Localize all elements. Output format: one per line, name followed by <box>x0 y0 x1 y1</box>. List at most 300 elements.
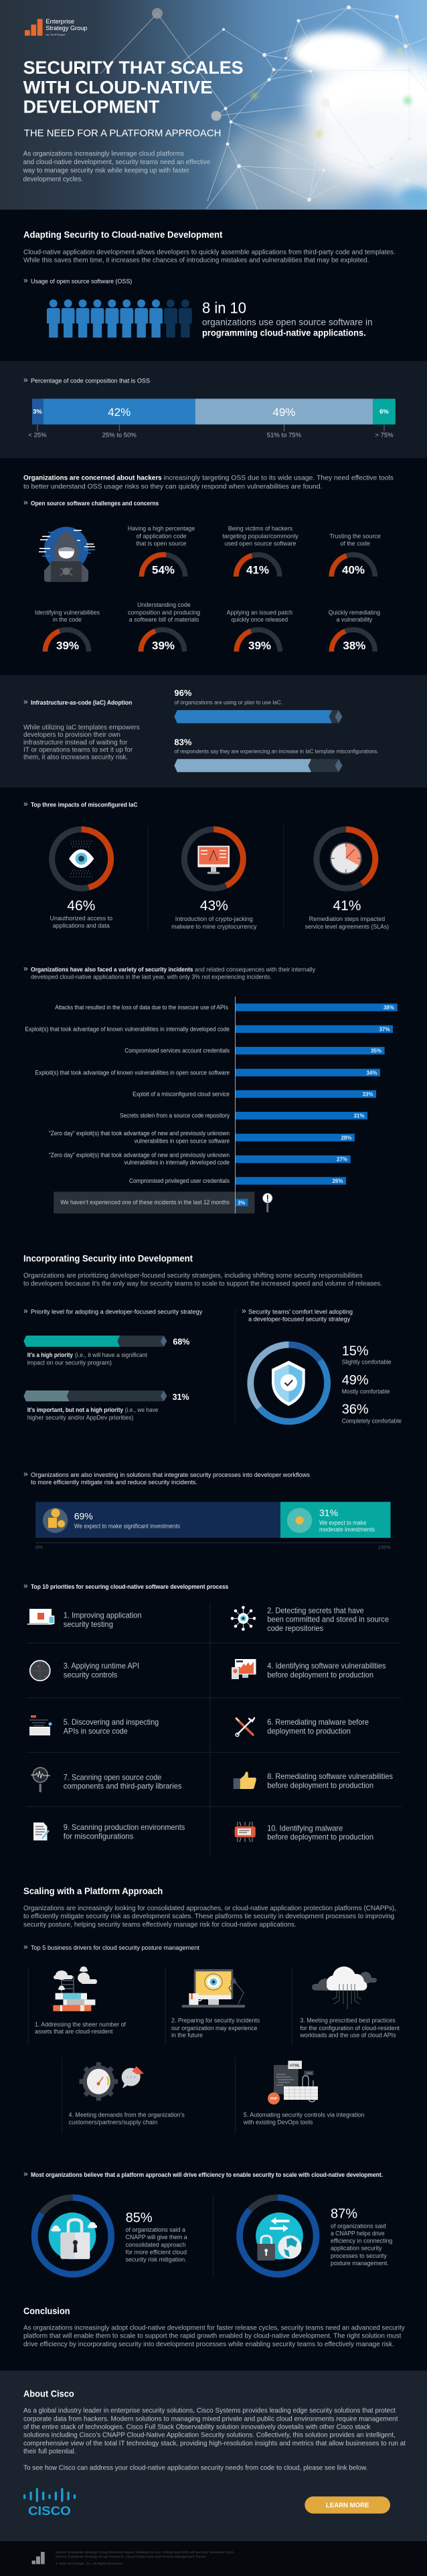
logo: Enterprise Strategy Group: by TechTarget <box>46 33 66 36</box>
label: usage of OSS <box>23 276 132 285</box>
gauge: 39% understanding code: composition and producing <box>128 609 200 616</box>
bar chart: security incidents: Secrets stolen from a source code repository <box>120 1113 230 1120</box>
bar chart: security incidents: Exploit of a misconfigured cloud service <box>133 1090 230 1098</box>
logo: Cisco: CISCO <box>28 2504 71 2518</box>
label: investing in solutions: » <box>23 1470 28 1479</box>
priority 7 <box>31 1768 181 1792</box>
intro text: and cloud-native development, security teams need an effective <box>23 158 211 166</box>
bar chart: security incidents: 28% <box>341 1135 352 1141</box>
impact: 41% remediation <box>305 829 389 930</box>
legend: comfort levels: 36% <box>342 1403 369 1417</box>
title <box>23 58 244 117</box>
bar chart: security incidents: Compromised privileged user credentials <box>129 1177 230 1185</box>
illustration: code, keyboard, PHP: PHP <box>270 2097 278 2101</box>
section intro: consolidated approaches: Organizations are increasingly looking for consolidated approaches, or cloud-native application protection platforms (CNAPPs), <box>23 1904 396 1912</box>
stat bar: 83% <box>174 737 379 772</box>
gauge: 39% understanding code: 39% <box>152 639 175 652</box>
stacked bar chart: 49% <box>272 406 295 419</box>
stacked bar: investment expectations: 69% <box>74 1510 93 1521</box>
illustration: gear gauge and chat <box>79 2062 144 2100</box>
gauge: 54%: 54% <box>152 564 175 577</box>
footer logo bars <box>32 2552 45 2564</box>
priority 4: 4. Identifying software vulnerabilities <box>267 1661 386 1670</box>
section intro: consolidated approaches: to efficiently mitigate security risk as development scales. These platforms tie security in development processes to improving <box>23 1912 394 1920</box>
section intro: prioritizing strategies <box>23 1271 382 1287</box>
stat: 8 in 10 organizations <box>202 299 373 338</box>
text: organizations concerned about hackers: Organizations are concerned about hackers <box>23 474 162 482</box>
stacked bar chart: 51% to 75% <box>267 432 302 439</box>
subtitle: THE NEED FOR A PLATFORM APPROACH <box>24 127 221 139</box>
priority 4 <box>232 1659 386 1679</box>
callout box: no incidents <box>54 1192 254 1214</box>
stacked bar: investment expectations: moderate investments <box>319 1526 375 1532</box>
stat bar: 96%: 96% <box>174 688 192 698</box>
impact: 46% unauthorized access: applications and data <box>53 922 110 930</box>
icon: single coin <box>287 1508 312 1533</box>
gauge grid: challenges <box>35 525 381 652</box>
about Cisco text: corporate data from hackers. Modern solutions to managing mixed private and public cloud environments require management <box>23 2415 398 2423</box>
bar chart: security incidents: 34% <box>366 1070 377 1076</box>
section intro text: Cloud-native application development allows developers to quickly assemble applications from third-party code and templates. <box>23 248 396 256</box>
label: top three impacts <box>23 799 138 809</box>
bar chart: security incidents: Attacks that resulted in the loss of data due to the insecure use of APIs <box>55 1004 228 1011</box>
stacked bar: investment expectations: 100% <box>377 1545 391 1551</box>
panel: about Cisco <box>0 2370 427 2541</box>
gauge: 38% <box>329 609 380 652</box>
about Cisco text: As a global industry leader in enterprise security solutions, Cisco Systems provides leading edge security solutions that protect <box>23 2407 396 2415</box>
icon: coin stack <box>43 1508 68 1533</box>
label: percentage of code composition <box>23 375 150 385</box>
impact: 46% unauthorized access: 46% <box>67 898 95 914</box>
label: platform approach belief <box>23 2169 383 2179</box>
label: percentage of code composition: » <box>23 375 28 384</box>
bar: 68% high priority: impact on our security program) <box>27 1359 112 1366</box>
stat: 8 in 10 organizations: 8 in 10 <box>202 299 246 317</box>
section intro: consolidated approaches <box>23 1904 396 1929</box>
impact: 46% unauthorized access: Unauthorized access to <box>50 915 112 922</box>
label: priority level: Priority level for adopting a developer-focused security strategy <box>31 1309 203 1316</box>
logo: Enterprise Strategy Group <box>25 18 87 36</box>
illustration: code, keyboard, PHP: .cmd <box>306 2072 312 2075</box>
legend: comfort levels: Mostly comfortable <box>342 1388 390 1395</box>
text: security incidents intro <box>23 964 315 981</box>
label: investing in solutions: to more efficiently mitigate risk and reduce security incidents. <box>31 1479 197 1486</box>
icon: clock <box>330 842 362 874</box>
legend: comfort levels: 49% <box>342 1373 369 1388</box>
stat bar: 96% <box>174 688 343 723</box>
priority 2: been committed and stored in source <box>267 1615 389 1624</box>
conclusion text: drive efficiency by incorporating security into development processes while enabling security teams to effectively manage risk. <box>23 2340 394 2348</box>
illustration: monitor with eye <box>182 1969 245 2007</box>
bar chart: security incidents: 31% <box>353 1113 364 1119</box>
bar: 68% high priority: It’s a high priority <box>27 1352 74 1359</box>
IaC text block: developers to provision their own <box>23 731 120 739</box>
footer <box>0 2541 427 2576</box>
section heading: Conclusion: Conclusion <box>23 2306 70 2316</box>
label: IaC adoption <box>23 697 132 707</box>
intro text: As organizations increasingly leverage cloud platforms <box>23 149 184 157</box>
label: open source challenges <box>23 498 159 508</box>
driver 5: with existing DevOps tools <box>243 2119 313 2127</box>
source notes: Source: Enterprise Strategy Group Research, Cloud Entitlements and Posture Management Trends <box>56 2555 206 2558</box>
driver 5 <box>243 2061 364 2127</box>
intro text <box>23 149 211 183</box>
icon: keyboard and code <box>29 1715 52 1735</box>
priority 3 <box>30 1660 139 1680</box>
icon: thumbs up <box>234 1772 256 1789</box>
source notes <box>56 2551 234 2565</box>
label: open source challenges: Open source software challenges and concerns <box>31 500 159 508</box>
label: usage of OSS: » <box>23 276 28 285</box>
legend: comfort levels: Slightly comfortable <box>342 1359 392 1366</box>
stat: 85% CNAPP: security risk mitigation. <box>126 2257 187 2264</box>
priority 3: security controls <box>64 1670 117 1679</box>
gauge: 39% issued patch: quickly once released <box>231 616 288 624</box>
gauge: 39% understanding code: a software bill of materials <box>129 616 199 624</box>
IaC text block: infrastructure instead of waiting for <box>23 738 128 746</box>
panel: code composition <box>0 361 427 458</box>
conclusion text <box>23 2324 405 2348</box>
priority 6: 6. Remediating malware before <box>267 1717 369 1727</box>
text: security incidents intro: and related consequences with their internally <box>195 966 315 973</box>
gauge: 39% understanding code: Understanding code <box>137 601 191 609</box>
gauge: 39% identifying vulnerabilities <box>35 609 100 652</box>
bar chart: security incidents: 33% <box>362 1091 373 1097</box>
title: DEVELOPMENT <box>23 96 160 117</box>
driver 5: 5. Automating security controls via integration <box>244 2112 364 2119</box>
label: top 10 priorities: Top 10 priorities for securing cloud-native software development process <box>31 1583 228 1591</box>
gauge: 39% issued patch <box>227 609 292 652</box>
priority 10 <box>235 1822 373 1842</box>
IaC text block: While utilizing IaC templates empowers <box>23 723 140 731</box>
bar chart: security incidents: 26% <box>332 1178 343 1184</box>
priority 7: 7. Scanning open source code <box>64 1772 162 1782</box>
bar chart: security incidents: 37% <box>379 1026 390 1032</box>
stat: 87% CNAPP: processes to security <box>331 2252 387 2260</box>
priority 3: 3. Applying runtime API <box>64 1661 139 1670</box>
section intro: prioritizing strategies: to developers because it’s the only way for security teams to scale to support the increased speed and volume of releases. <box>23 1279 382 1287</box>
priority 10: before deployment to production <box>267 1833 373 1842</box>
priority 9: for misconfigurations <box>64 1831 133 1841</box>
gauge: 41%: used open source software <box>225 540 296 547</box>
driver 3: workloads and the use of cloud APIs <box>299 2032 396 2040</box>
logo: Enterprise Strategy Group: Enterprise <box>46 18 74 25</box>
about Cisco text: To see how Cisco can address your cloud-native application security needs from code to cloud, please see link below. <box>23 2464 367 2472</box>
stacked bar chart: > 75% <box>375 432 394 439</box>
gauge: 41%: Being victims of hackers <box>228 525 292 532</box>
gauge: 38%: Quickly remediating <box>329 609 380 616</box>
gauge: 39% identifying vulnerabilities: in the code <box>53 616 82 624</box>
priority 7: components and third-party libraries <box>64 1782 181 1791</box>
text: security incidents intro: Organizations have also faced a variety of security incidents <box>31 966 193 973</box>
gauge: 39% issued patch: 39% <box>248 639 271 652</box>
stacked bar chart <box>28 399 396 439</box>
priority 6 <box>236 1717 369 1736</box>
icon: magnifier waveform <box>31 1768 50 1792</box>
priority 9: 9. Scanning production environments <box>64 1822 185 1832</box>
stat: 87% CNAPP <box>240 2198 392 2275</box>
priority 2: code repositories <box>267 1624 323 1633</box>
stat: 85% CNAPP: of organizations said a <box>126 2226 186 2234</box>
label: platform approach belief: Most organizations believe that a platform approach will drive efficiency to enable security to scale with cloud-native development. <box>31 2171 383 2179</box>
label: priority level: » <box>23 1306 28 1315</box>
stacked bar: investment expectations: 0% <box>35 1545 43 1551</box>
logo: Enterprise Strategy Group: Strategy Group <box>46 25 87 32</box>
stat: 87% CNAPP: application security <box>331 2245 382 2252</box>
bar chart: security incidents: 3% <box>238 1200 245 1206</box>
stacked bar chart: 3% <box>33 409 42 416</box>
gauge: 54%: of application code <box>136 532 187 540</box>
label: investing in solutions: Organizations are also investing in solutions that integrate security processes into developer workflows <box>31 1472 310 1479</box>
stat: 85% CNAPP: CNAPP will give them a <box>126 2234 187 2241</box>
stat: 85% CNAPP: consolidated approach <box>126 2241 186 2248</box>
driver 1: assets that are cloud-resident <box>35 2028 113 2035</box>
stacked bar chart: 42% <box>108 406 131 419</box>
panel: comfort level <box>242 1306 402 1425</box>
conclusion text: As organizations increasingly adopt cloud-native development for faster release cycles, security teams need an advanced security <box>23 2324 405 2332</box>
bar chart: security incidents: “Zero day” exploit(s) that took advantage of new and previously unknown <box>49 1151 230 1159</box>
label: top three impacts: » <box>23 799 28 808</box>
label: top 5 business drivers: Top 5 business drivers for cloud security posture management <box>31 1944 199 1952</box>
bar chart: security incidents: 27% <box>337 1157 347 1163</box>
bar chart: security incidents: We haven’t experienced one of these incidents in the last 12 months <box>60 1199 230 1206</box>
source notes: © 2023 TechTarget, Inc. All Rights Reserved. <box>56 2561 123 2565</box>
gauge: 54%: Having a high percentage <box>128 525 195 532</box>
about Cisco text: of the entire stack of technologies. Cisco Full Stack Observability solution innovatively dovetails with other Cisco stack <box>23 2423 371 2431</box>
label: usage of OSS: Usage of open source software (OSS) <box>31 278 132 285</box>
bar chart: security incidents: “Zero day” exploit(s) that took advantage of new and previously unknown <box>49 1130 230 1137</box>
source notes: Source: Enterprise Strategy Group Research Report, Walking the Line: GitOps and Shift Left Security, November 2022. <box>56 2551 234 2554</box>
icon: padlock with clouds <box>49 2212 97 2259</box>
stat: 85% CNAPP: 85% <box>126 2210 153 2225</box>
icon: laptop and phone <box>27 1609 54 1625</box>
priority 8 <box>234 1772 393 1790</box>
impact: 43% crypto-jacking: malware to mine cryptocurrency <box>171 923 257 930</box>
label: comfort level: Security teams’ comfort level adopting <box>248 1309 353 1316</box>
label: percentage of code composition: Percentage of code composition that is OSS <box>31 378 150 385</box>
title: WITH CLOUD-NATIVE <box>23 77 213 97</box>
logo: Cisco <box>23 2488 76 2518</box>
bar chart: security incidents: vulnerabilities in open source software <box>135 1137 230 1145</box>
panel: IaC adoption <box>0 675 427 788</box>
driver 2: our organization may experience <box>171 2025 257 2032</box>
intro text: way to manage security risk while keeping up with faster <box>23 167 189 175</box>
priority 4: before deployment to production <box>267 1670 373 1679</box>
gauge: 40%: Trusting the source <box>329 532 381 540</box>
driver 1 <box>35 1966 126 2035</box>
impact: 41% remediation: service level agreements (SLAs) <box>305 923 389 930</box>
priority 2 <box>231 1605 389 1633</box>
gauge: 40%: 40% <box>342 564 365 577</box>
bar chart: security incidents: 38% <box>383 1005 394 1011</box>
label: IaC adoption: Infrastructure-as-code (IaC) Adoption <box>31 699 132 707</box>
icon: eye <box>69 841 94 877</box>
gauge: 39% issued patch: Applying an issued patch <box>227 609 292 616</box>
impact: 43% crypto-jacking: 43% <box>200 898 228 914</box>
hero banner <box>0 0 427 221</box>
driver 2: 2. Preparing for security incidents <box>171 2017 260 2025</box>
text: organizations concerned about hackers: to better understand OSS usage risks so they can quickly respond when vulnerabilities are found. <box>23 482 322 490</box>
stat bar: 96%: of organizations are using or plan to use IaC. <box>174 699 282 705</box>
icon: eye network <box>231 1606 256 1630</box>
driver 3 <box>299 1966 400 2040</box>
icon: monitor <box>197 846 230 874</box>
title: SECURITY THAT SCALES <box>23 58 244 78</box>
impact: 41% remediation: 41% <box>333 898 361 914</box>
stacked bar chart: 6% <box>379 409 389 416</box>
hero sky and cloud background <box>0 0 427 221</box>
icon: magnifier alert <box>262 1193 272 1212</box>
gauge: 41% <box>222 525 298 577</box>
driver 1: 1. Addressing the sheer number of <box>35 2021 126 2028</box>
bar chart: security incidents: Exploit(s) that took advantage of known vulnerabilities in internally developed code <box>25 1025 230 1033</box>
legend: comfort levels: Completely comfortable <box>342 1417 402 1425</box>
label: open source challenges: » <box>23 498 28 507</box>
conclusion text: platform that will enable them to scale to support the rapid growth enabled by cloud-native development. The right solution must <box>23 2332 401 2340</box>
about Cisco text: comprehensive view of the total IT technology stack, providing high-resolution insights and metrics that allow businesses to run at <box>23 2439 406 2447</box>
stacked bar: investment expectations: 31% <box>319 1507 338 1518</box>
stat bar: 83%: 83% <box>174 737 192 747</box>
bar: 68% high priority <box>23 1336 189 1366</box>
heading: About Cisco: About Cisco <box>23 2388 74 2399</box>
priority 1: security testing <box>64 1620 113 1629</box>
IaC text block: them, it also increases security risk. <box>23 754 128 762</box>
label: top 10 priorities <box>23 1581 228 1591</box>
label: top 10 priorities: » <box>23 1581 28 1590</box>
driver 2 <box>171 1969 260 2040</box>
impact: 43% crypto-jacking <box>171 829 257 930</box>
button: learn more <box>305 2496 390 2514</box>
impact: 46% unauthorized access <box>50 829 112 930</box>
priority 8: before deployment to production <box>267 1780 373 1790</box>
priority 9 <box>33 1822 185 1841</box>
stat: 87% CNAPP: 87% <box>331 2207 357 2222</box>
illustration: code, keyboard, PHP <box>268 2061 318 2104</box>
section intro: prioritizing strategies: Organizations are prioritizing developer-focused security strategies, including shifting some security responsibilities <box>23 1271 363 1279</box>
bar chart: security incidents <box>25 997 398 1214</box>
about Cisco text: their full potential. <box>23 2447 76 2455</box>
intro text: development cycles. <box>23 175 83 183</box>
gauge: 38%: 38% <box>343 639 365 652</box>
illustration: clouds, ladder and books <box>53 1966 97 2011</box>
stacked bar: investment expectations: We expect to make significant investments <box>74 1522 180 1529</box>
about Cisco text: solutions including Cisco’s CNAPP Cloud-Native Application Security solutions. Collectively, this solution provides an intelligent, <box>23 2431 396 2439</box>
IaC text block <box>23 723 140 762</box>
button: learn more: LEARN MORE <box>326 2501 369 2509</box>
bar: 31% important: It’s important, but not a high priority <box>27 1407 124 1414</box>
gauge: 41%: 41% <box>246 564 269 577</box>
bar chart: security incidents: Compromised services account credentials <box>124 1048 230 1055</box>
label: comfort level <box>242 1306 353 1323</box>
bar: 31% important: higher security and/or AppDev priorities) <box>27 1414 133 1421</box>
bar: 68% high priority: (i.e., it will have a significant <box>75 1352 147 1359</box>
priority 6: deployment to production <box>267 1726 351 1735</box>
label: top three impacts: Top three impacts of misconfigured IaC <box>31 802 138 809</box>
illustration: code, keyboard, PHP: HTML <box>290 2064 301 2068</box>
priority 5 <box>29 1715 159 1735</box>
section intro: consolidated approaches: security posture, helping security teams effectively manage risk for cloud-native applications. <box>23 1921 296 1929</box>
label: comfort level: a developer-focused security strategy <box>248 1316 351 1323</box>
label: top 5 business drivers: » <box>23 1942 28 1952</box>
icon: wrench and screwdriver <box>236 1718 254 1736</box>
stat: 87% CNAPP: of organizations said <box>331 2222 386 2230</box>
section intro text <box>23 248 396 265</box>
section heading: Scaling: Scaling with a Platform Approach <box>23 1886 163 1896</box>
driver 4: 4. Meeting demands from the organization’s <box>68 2112 185 2119</box>
label: platform approach belief: » <box>23 2169 28 2178</box>
stat: 85% CNAPP: for more efficient cloud <box>126 2248 187 2256</box>
stacked bar chart: < 25% <box>28 432 47 439</box>
IaC text block: IT or operations teams to set it up for <box>23 745 133 754</box>
label: investing in solutions <box>23 1470 310 1486</box>
icon: radar <box>30 1660 50 1680</box>
priority 2: 2. Detecting secrets that have <box>267 1605 364 1615</box>
text: security incidents intro: developed cloud-native applications in the last year, with only 3% not experiencing incidents. <box>31 974 272 981</box>
priority 1 <box>27 1609 142 1629</box>
bar chart: security incidents: 35% <box>371 1048 381 1054</box>
gauge: 54%: that is open source <box>136 540 187 547</box>
bar: 31% important <box>23 1390 189 1421</box>
stat: 87% CNAPP: posture management. <box>331 2260 389 2267</box>
driver 4: customers/partners/supply chain <box>68 2119 157 2127</box>
stat bar: 83%: of respondents say they are experiencing an increase in IaC template misconfigurations. <box>174 748 379 755</box>
gauge: 38%: a vulnerability <box>337 616 372 624</box>
priority 5: APIs in source code <box>64 1726 128 1735</box>
driver 4 <box>68 2062 185 2127</box>
icon: monitor with chart <box>232 1659 256 1679</box>
bar: 31% important: 31% <box>173 1392 189 1402</box>
stacked bar: investment expectations: We expect to make <box>319 1519 366 1526</box>
label: IaC adoption: » <box>23 697 28 706</box>
bar chart: security incidents: Exploit(s) that took advantage of known vulnerabilities in open source software <box>35 1069 230 1076</box>
stat: 87% CNAPP: efficiency in connecting <box>331 2238 392 2245</box>
driver 3: for the configuration of cloud-resident <box>300 2025 400 2032</box>
stat: 87% CNAPP: a CNAPP helps drive <box>331 2230 385 2237</box>
priority 5: 5. Discovering and inspecting <box>64 1717 159 1727</box>
panel: priority level <box>23 1306 203 1421</box>
legend: comfort levels: 15% <box>342 1344 369 1358</box>
stat: 8 in 10 organizations: organizations use open source software in <box>202 317 373 327</box>
icon: shield <box>272 1361 305 1406</box>
priority 1: 1. Improving application <box>64 1611 142 1620</box>
section heading: Adapting Security: Adapting Security to Cloud-native Development <box>23 230 223 240</box>
gauge: 41%: targeting popular/commonly <box>222 532 298 540</box>
donut chart: comfort <box>250 1345 327 1421</box>
gauge: 40%: of the code <box>340 540 370 547</box>
impact: 43% crypto-jacking: Introduction of crypto-jacking <box>175 916 253 923</box>
illustration: circuit cloud <box>312 1966 377 2009</box>
text: security incidents intro: » <box>23 964 28 973</box>
pictogram: 8 in 10 people <box>47 299 192 338</box>
impact: 41% remediation: Remediation steps impacted <box>309 916 385 923</box>
stacked bar chart: 25% to 50% <box>102 432 137 439</box>
stat: 8 in 10 organizations: programming cloud-native applications. <box>202 328 366 338</box>
section heading: Incorporating Security: Incorporating Security into Development <box>23 1253 193 1263</box>
priority 10: 10. Identifying malware <box>267 1823 343 1833</box>
icon: document and pen <box>33 1822 49 1841</box>
stacked bar: investment expectations <box>35 1502 391 1551</box>
stat: 85% CNAPP <box>35 2198 187 2275</box>
icon: hooded hacker <box>39 526 95 582</box>
icon: lock, arrows, globe <box>256 2212 303 2261</box>
section intro text: While this saves them time, it increases the chances of introducing mistakes and vulnerabilities that may be exploited. <box>23 257 369 265</box>
gauge: 54% <box>128 525 195 577</box>
text: organizations concerned about hackers: increasingly targeting OSS due to its wide usage. They need effective tools <box>163 474 394 482</box>
gauge: 39% understanding code <box>128 601 200 652</box>
bar: 68% high priority: 68% <box>173 1337 189 1346</box>
icon: red tag with circuits <box>235 1822 256 1842</box>
bar: 31% important: (i.e., we have <box>125 1407 158 1414</box>
